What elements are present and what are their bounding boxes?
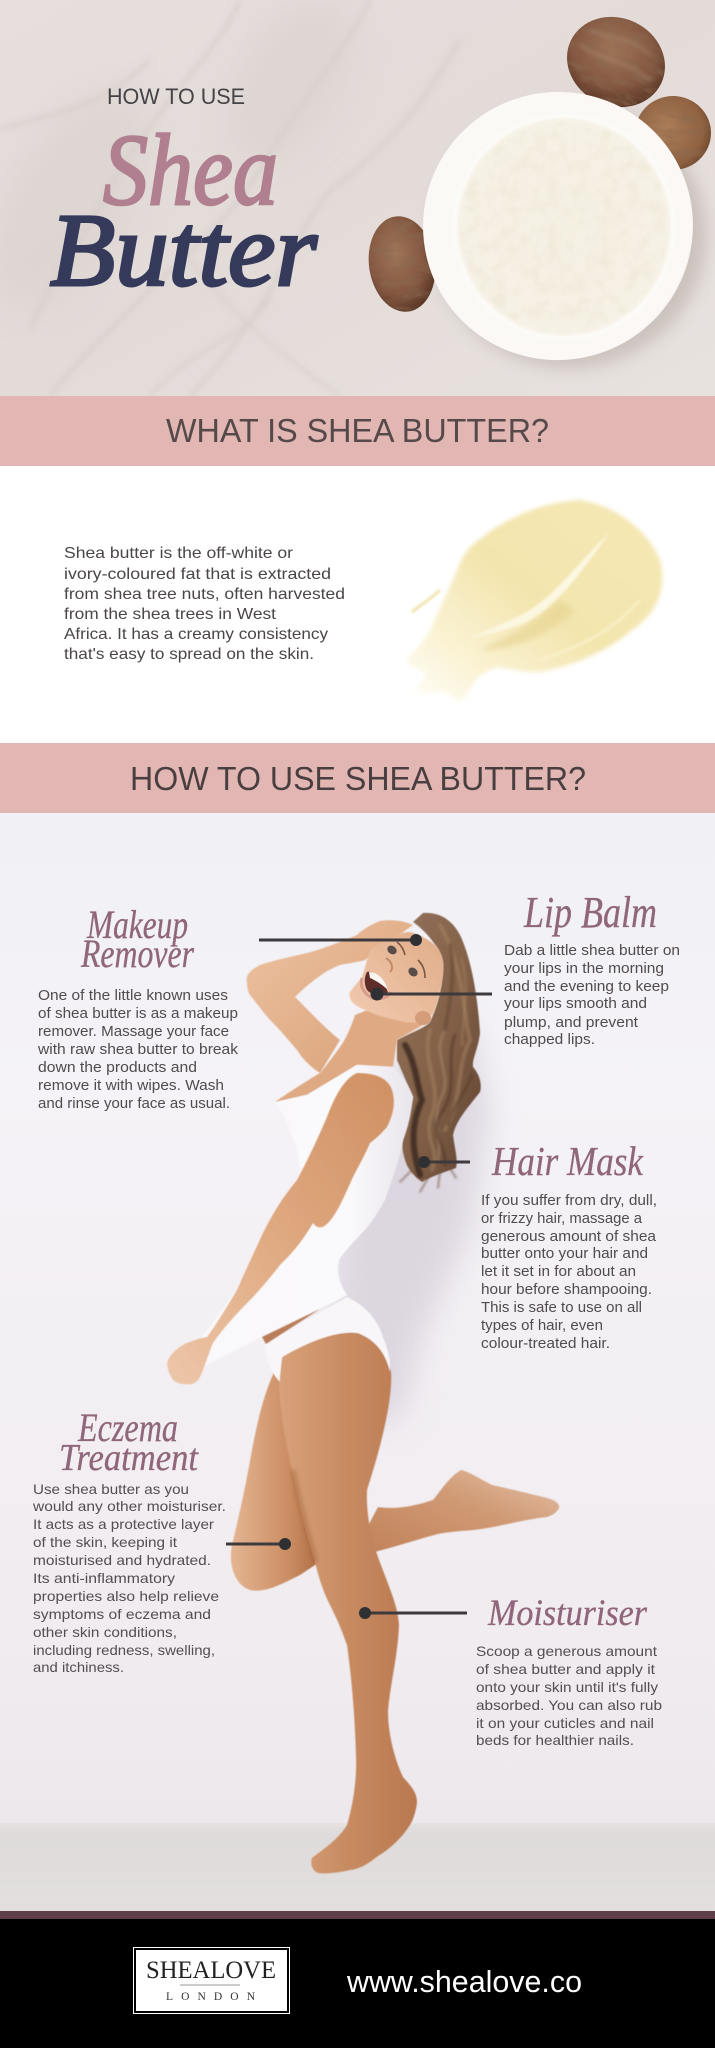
band: how to use shea butter: [0, 743, 715, 813]
raised arm: [247, 920, 413, 1073]
callout: makeup remover: [37, 902, 239, 1112]
band: what is shea butter: [0, 396, 715, 466]
definition paragraph: from the shea trees in West: [64, 606, 277, 623]
callout: hair mask: [481, 1138, 657, 1352]
callout: hair mask: butter onto your hair and: [481, 1246, 648, 1262]
callout: lip balm: plump, and prevent: [504, 1015, 638, 1031]
callout: eczema treatment: other skin conditions,: [33, 1624, 177, 1640]
callout: eczema treatment: Eczema: [77, 1405, 178, 1450]
marker: eczema treatment line and dot: [226, 1538, 291, 1550]
callout: eczema treatment: Its anti-inflammatory: [33, 1570, 175, 1586]
callout: eczema treatment: It acts as a protective layer: [33, 1516, 214, 1532]
website url: www.shealove.co: [346, 1964, 582, 1999]
callout: eczema treatment: would any other moisturiser.: [32, 1498, 226, 1514]
marker: moisturiser line and dot: [359, 1607, 467, 1619]
logo: Shealove London: SHEALOVE: [146, 1957, 276, 1984]
callout: moisturiser: onto your skin until it's fully: [476, 1679, 658, 1695]
marker: makeup remover line and dot: [259, 934, 422, 946]
logo: Shealove London: [134, 1948, 290, 2014]
marker: lip balm line and dot: [370, 988, 492, 1000]
callout: makeup remover: Remover: [80, 931, 194, 976]
definition paragraph: [64, 545, 345, 663]
callout: eczema treatment: moisturised and hydrated.: [33, 1552, 211, 1568]
definition paragraph: from shea tree nuts, often harvested: [64, 586, 345, 603]
callout: hair mask: generous amount of shea: [481, 1229, 657, 1245]
callout: hair mask: let it set in for about an: [481, 1264, 636, 1280]
figure: woman: [167, 913, 559, 1873]
nut: left: [363, 212, 441, 316]
back lower leg and foot: [350, 1470, 559, 1560]
callout: makeup remover: of shea butter is as a makeup: [38, 1006, 238, 1022]
callout: makeup remover: and rinse your face as usual.: [38, 1096, 230, 1112]
bent thigh: [231, 1372, 330, 1591]
floor: [0, 1823, 715, 1911]
logo: Shealove London: LONDON: [166, 1991, 256, 2003]
callout: makeup remover: with raw shea butter to break: [37, 1042, 239, 1058]
hero: marble background with jar: [0, 0, 715, 396]
callout: makeup remover: One of the little known uses: [38, 988, 228, 1004]
nut: right: [635, 96, 711, 170]
briefs: [265, 1297, 390, 1382]
definition paragraph: Africa. It has a creamy consistency: [64, 626, 328, 643]
facial features: [361, 942, 431, 1025]
callout: moisturiser: beds for healthier nails.: [476, 1732, 634, 1748]
callout: eczema treatment: Use shea butter as you: [33, 1481, 189, 1497]
band: what is shea butter: WHAT IS SHEA BUTTER?: [166, 412, 549, 449]
callout: moisturiser: [476, 1593, 662, 1748]
callout: moisturiser: of shea butter and apply it: [476, 1661, 655, 1677]
callout: lip balm: Lip Balm: [523, 888, 657, 937]
callout: hair mask: or frizzy hair, massage a: [481, 1211, 643, 1227]
definition paragraph: Shea butter is the off-white or: [64, 545, 294, 562]
definition paragraph: that's easy to spread on the skin.: [64, 646, 314, 663]
callout: eczema treatment: [32, 1405, 226, 1675]
callout: hair mask: types of hair, even: [481, 1318, 603, 1334]
panel: how to use, photo of woman: [0, 813, 715, 1911]
callout: makeup remover: Makeup: [86, 902, 188, 947]
callout: lip balm: [504, 888, 680, 1048]
callout: lip balm: Dab a little shea butter on: [504, 943, 680, 959]
callout: makeup remover: down the products and: [38, 1060, 197, 1076]
shadow under jar: [434, 104, 706, 368]
front arm: [167, 1073, 394, 1384]
callout: hair mask: hour before shampooing.: [481, 1282, 652, 1298]
callout: lip balm: and the evening to keep: [504, 979, 669, 995]
face: [349, 932, 443, 1023]
callout: eczema treatment: symptoms of eczema and: [33, 1606, 211, 1622]
callout: hair mask: colour-treated hair.: [481, 1336, 610, 1352]
standing leg: [279, 1332, 417, 1873]
neck and chest: [275, 1005, 428, 1102]
hair back: [397, 913, 481, 1182]
callout: lip balm: your lips in the morning: [504, 961, 664, 977]
hero title: Butter: Butter: [50, 193, 318, 308]
callout: hair mask: If you suffer from dry, dull,: [481, 1193, 657, 1209]
shading between legs: [293, 1470, 316, 1562]
callout: moisturiser: Scoop a generous amount: [476, 1643, 657, 1659]
callout: makeup remover: remover. Massage your face: [38, 1024, 229, 1040]
nut: top: [552, 1, 680, 123]
panel: what is shea butter: [0, 466, 715, 743]
callout: eczema treatment: of the skin, keeping it: [33, 1534, 177, 1550]
callout: makeup remover: remove it with wipes. Wash: [38, 1078, 224, 1094]
callout: lip balm: your lips smooth and: [504, 996, 647, 1012]
band: how to use shea butter: HOW TO USE SHEA BUTTER?: [130, 760, 586, 797]
footer: [0, 1911, 715, 2048]
callout: eczema treatment: Treatment: [59, 1437, 199, 1479]
hero kicker: how to use: HOW TO USE: [107, 84, 245, 109]
tank top: [200, 1065, 413, 1367]
marker: hair mask line and dot: [418, 1156, 470, 1168]
callout: lip balm: chapped lips.: [504, 1032, 595, 1048]
callout: moisturiser: Moisturiser: [487, 1593, 648, 1634]
wall shadow behind figure: [330, 1020, 490, 1420]
callout: eczema treatment: including redness, swelling,: [33, 1642, 215, 1658]
callout: moisturiser: absorbed. You can also rub: [476, 1697, 662, 1713]
callout: hair mask: Hair Mask: [491, 1138, 644, 1184]
callout: moisturiser: it on your cuticles and nail: [476, 1715, 654, 1731]
definition paragraph: ivory-coloured fat that is extracted: [64, 566, 331, 583]
jar of shea butter: [393, 62, 715, 390]
callout: eczema treatment: properties also help relieve: [33, 1588, 219, 1604]
hero title: Shea: Shea: [103, 114, 278, 227]
callout: eczema treatment: and itchiness.: [33, 1659, 124, 1675]
butter swatch: [406, 500, 662, 701]
callout: hair mask: This is safe to use on all: [481, 1300, 642, 1316]
